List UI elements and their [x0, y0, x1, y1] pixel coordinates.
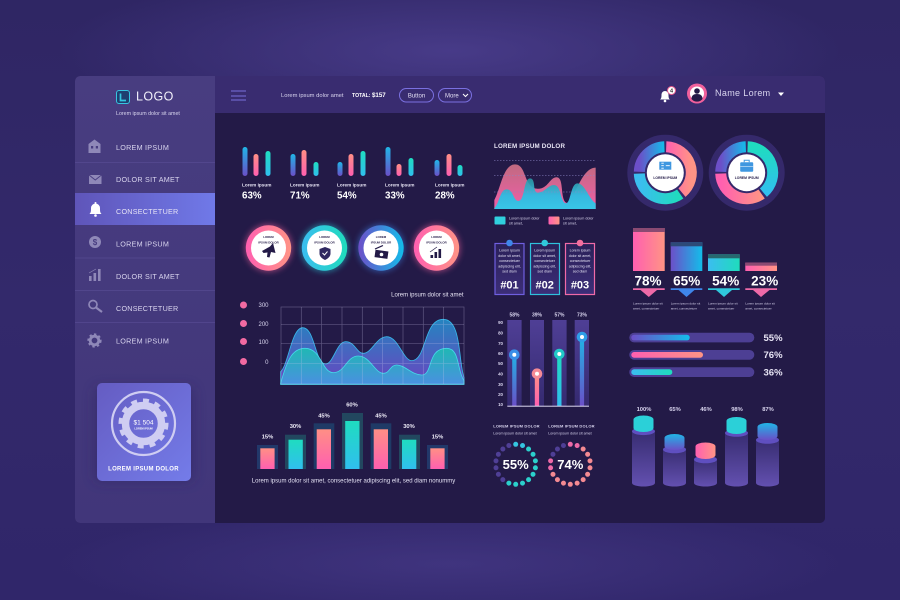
nav: lorem ipsum gear: LOREM IPSUM [116, 336, 169, 346]
chart legend [240, 302, 269, 366]
progress 55% [629, 333, 783, 344]
card 03: Lorem ipsum [570, 248, 590, 252]
gauge 55% [493, 424, 540, 487]
card 02: consectetuer [534, 259, 556, 263]
group 28% [434, 154, 464, 202]
menu icon [231, 91, 246, 100]
group 28%: 28% [435, 190, 455, 202]
cylinder 87%: 87% [762, 407, 774, 413]
lollipop axis labels: 20 [498, 392, 504, 397]
group 54% [337, 151, 366, 202]
bar chart caption: Lorem ipsum dolor sit amet, consectetuer adipiscing elit, sed diam nonummy [252, 478, 455, 484]
nav: lorem ipsum [88, 140, 169, 153]
gauge 55%: 55% [503, 457, 529, 472]
group 71%: 71% [290, 190, 310, 202]
badge: growth chart: IPSUM DOLOR [426, 240, 448, 244]
group 54%: 54% [337, 190, 357, 202]
card 03 [566, 240, 594, 294]
block 23%: 23% [751, 274, 778, 288]
lollipop axis labels: 90 [498, 320, 504, 325]
lollipop baseline [507, 406, 589, 407]
bar labels: 60% [346, 402, 358, 408]
badge: megaphone [244, 224, 292, 272]
wave legend: Lorem ipsum dolor [563, 216, 594, 220]
progress 76%: 76% [764, 350, 783, 361]
cylinder 87% [756, 407, 779, 486]
badge: money [357, 224, 405, 272]
group 71% [290, 150, 319, 202]
user name: Name Lorem [715, 88, 771, 98]
lollipop value labels: 73% [577, 312, 588, 318]
block 65% [671, 242, 702, 310]
lollipop 58 [509, 349, 520, 406]
lollipop value labels: 39% [532, 312, 543, 318]
cylinder 100% [632, 407, 655, 486]
gauge 55%: LOREM IPSUM DOLOR [493, 424, 540, 428]
promo card [95, 383, 193, 481]
nav: lorem ipsum gear [88, 334, 169, 347]
block 65%: amet, consectetuer [671, 306, 697, 310]
main panel [75, 76, 825, 523]
lollipop axis labels: 40 [498, 372, 504, 376]
card 02 [530, 240, 560, 294]
top bar [215, 76, 825, 113]
block 23%: Lorem ipsum dolor sit [745, 302, 775, 306]
card 01: #01 [500, 280, 519, 292]
card title: LOREM IPSUM DOLOR [108, 466, 179, 472]
badge: shield: IPSUM DOLOR [314, 240, 336, 244]
gear icon [121, 401, 166, 446]
cylinder 65% [663, 407, 686, 486]
donut 2 [709, 135, 785, 211]
bar labels: 15% [432, 434, 443, 440]
progress 76% [629, 350, 783, 361]
lollipop 57 [554, 349, 565, 406]
card 02: Lorem ipsum [534, 248, 555, 252]
block 54%: amet, consectetuer [708, 306, 734, 310]
logo: LOGO [136, 90, 174, 104]
donut 1: LOREM IPSUM [653, 176, 677, 180]
button: Button [408, 94, 425, 100]
lollipop value labels: 58% [509, 312, 520, 318]
block 23% [745, 263, 778, 310]
logo [116, 90, 180, 117]
lollipop chart [498, 312, 589, 407]
bar labels: 45% [375, 413, 387, 419]
more button: More [445, 94, 459, 100]
progress 36% [629, 367, 783, 378]
card 02: sed diam [537, 270, 552, 274]
cylinder 46%: 46% [700, 407, 712, 413]
wave title: LOREM IPSUM DOLOR [494, 143, 565, 150]
card 01: Lorem ipsum [499, 248, 520, 252]
block 23%: amet, consectetuer [745, 306, 772, 310]
bar backgrounds [257, 413, 448, 469]
nav: dolor sit amet bars [89, 269, 180, 281]
lollipop axis labels: 10 [498, 402, 504, 407]
card 03: dolor sit amet, [569, 254, 591, 258]
logo: Lorem ipsum dolor sit amet [116, 111, 180, 117]
block 78%: 78% [634, 274, 662, 288]
cylinder 65%: 65% [669, 407, 681, 413]
block 78% [633, 228, 665, 310]
block 54%: 54% [712, 274, 739, 288]
chart caption: Lorem ipsum dolor sit amet [391, 292, 464, 298]
chart legend: 200 [258, 322, 269, 328]
lollipop axis labels: 80 [498, 330, 504, 336]
card amount: $1 504 [134, 420, 154, 426]
wave dashed lines [494, 160, 596, 192]
more button [438, 88, 472, 102]
notification bell: 4 [670, 88, 674, 94]
badge: money: IPSUM DOLOR [371, 240, 392, 244]
cylinder 46% [694, 407, 717, 486]
card small label: LOREM IPSUM [134, 426, 153, 430]
group 54%: Lorem ipsum [337, 182, 366, 188]
card 03: consectetuer [570, 259, 591, 263]
badge: growth chart [412, 224, 460, 272]
card 01: adipiscing elit, [498, 264, 521, 268]
bar labels: 30% [403, 424, 415, 430]
progress bars [629, 333, 783, 378]
wave chart [494, 143, 596, 226]
gauge 74%: Lorem ipsum dolor sit amet [548, 432, 592, 436]
group 33% [385, 147, 414, 202]
percentage blocks [633, 228, 778, 310]
card 03: #03 [571, 280, 589, 292]
lollipop value labels [509, 312, 588, 318]
dotted gauges [493, 424, 595, 487]
badge: megaphone: LOREM [263, 235, 274, 239]
nav: dolor sit amet bars: DOLOR SIT AMET [116, 272, 180, 281]
bar labels [262, 402, 443, 440]
gauge 74% [548, 424, 595, 487]
wave areas [494, 164, 596, 209]
nav: consectetuer active [90, 202, 179, 217]
donut charts [627, 135, 785, 211]
progress 36%: 36% [764, 368, 783, 378]
chart legend: 0 [265, 360, 269, 366]
button [400, 88, 434, 102]
bar labels: 15% [262, 434, 273, 440]
card 02: adipiscing elit, [533, 264, 556, 268]
card 02: #02 [536, 280, 554, 292]
notification bell [660, 86, 676, 102]
sidebar [75, 76, 215, 523]
wave legend [494, 216, 594, 226]
lollipop axis labels: 60 [498, 351, 504, 356]
card 02: dolor sit amet, [533, 254, 556, 258]
card 03: adipiscing elit, [569, 264, 591, 268]
group 63% [242, 147, 271, 202]
nav: consectetuer search [89, 300, 179, 313]
card 01: sed diam [502, 270, 517, 274]
wave legend: sit amet, [563, 222, 577, 226]
nav: lorem ipsum dollar: LOREM IPSUM [116, 240, 169, 248]
numbered cards [495, 240, 594, 294]
nav: lorem ipsum: LOREM IPSUM [116, 143, 169, 152]
nav: dolor sit amet [89, 175, 180, 184]
lollipop axis labels [498, 320, 504, 407]
cylinder 98% [725, 407, 748, 486]
cylinder chart [632, 407, 779, 486]
group 63%: Lorem ipsum [242, 182, 271, 188]
wave legend: sit amet, [509, 222, 523, 226]
active item highlight [75, 193, 215, 225]
wave legend: Lorem ipsum dolor [509, 216, 540, 220]
badge: growth chart: LOREM [431, 235, 442, 239]
block 78%: Lorem ipsum dolor sit [633, 302, 663, 306]
lollipop tracks [507, 320, 589, 406]
block 78%: amet, consectetuer [633, 306, 659, 310]
nav: dolor sit amet: DOLOR SIT AMET [116, 175, 180, 184]
group 63%: 63% [242, 190, 262, 202]
donut 2: LOREM IPSUM [735, 176, 759, 180]
gradient bar chart [252, 402, 455, 484]
gauge 55%: Lorem ipsum dolor sit amet [493, 432, 537, 436]
top bar text: Lorem ipsum dolor amet [281, 93, 344, 99]
block 65%: 65% [673, 274, 700, 288]
badge: megaphone: IPSUM DOLOR [258, 240, 280, 244]
block 65%: Lorem ipsum dolor sit [671, 302, 700, 306]
cylinder 98%: 98% [731, 407, 743, 413]
area chart [240, 292, 464, 384]
icon badges [244, 224, 460, 272]
nav: lorem ipsum dollar: $ [93, 238, 98, 247]
progress ring [112, 392, 175, 455]
bar labels: 45% [318, 413, 330, 419]
badge: shield [300, 224, 348, 272]
nav: consectetuer active: CONSECTETUER [116, 207, 179, 216]
card 03: sed diam [573, 270, 587, 274]
lollipop axis labels: 50 [498, 361, 504, 366]
badge: shield: LOREM [319, 235, 330, 239]
lollipop axis labels: 70 [498, 341, 504, 346]
lollipop axis labels: 30 [498, 382, 504, 387]
card 01 [495, 240, 524, 294]
lollipop 39 [532, 368, 542, 406]
bar fills [260, 421, 445, 469]
dropdown arrow [778, 92, 784, 96]
lollipop 73 [577, 332, 587, 406]
gauge 74%: LOREM IPSUM DOLOR [548, 424, 595, 428]
cylinder 100%: 100% [637, 407, 651, 413]
group 33%: 33% [385, 190, 405, 202]
chart legend: 300 [258, 303, 269, 309]
nav: lorem ipsum dollar [89, 236, 169, 248]
gauge 74%: 74% [557, 457, 584, 472]
group 71%: Lorem ipsum [290, 182, 319, 188]
group 33%: Lorem ipsum [385, 182, 414, 188]
chart grid [281, 307, 464, 384]
avatar [687, 84, 707, 104]
progress 55%: 55% [764, 333, 783, 344]
lollipop value labels: 57% [554, 312, 565, 318]
card 01: dolor sit amet, [498, 254, 521, 258]
bar labels: 30% [290, 424, 301, 430]
block 54% [708, 254, 740, 310]
total: TOTAL: $157 [352, 92, 386, 99]
chart areas [281, 319, 464, 384]
mini bar groups [242, 147, 464, 202]
donut 1 [627, 135, 703, 211]
dividers [75, 162, 215, 322]
card 01: consectetuer [499, 259, 521, 263]
chart legend: 100 [258, 340, 269, 346]
nav: consectetuer search: CONSECTETUER [116, 304, 179, 313]
block 54%: Lorem ipsum dolor sit [708, 302, 738, 306]
group 28%: Lorem ipsum [435, 182, 464, 188]
badge: money: LOREM [376, 235, 387, 239]
